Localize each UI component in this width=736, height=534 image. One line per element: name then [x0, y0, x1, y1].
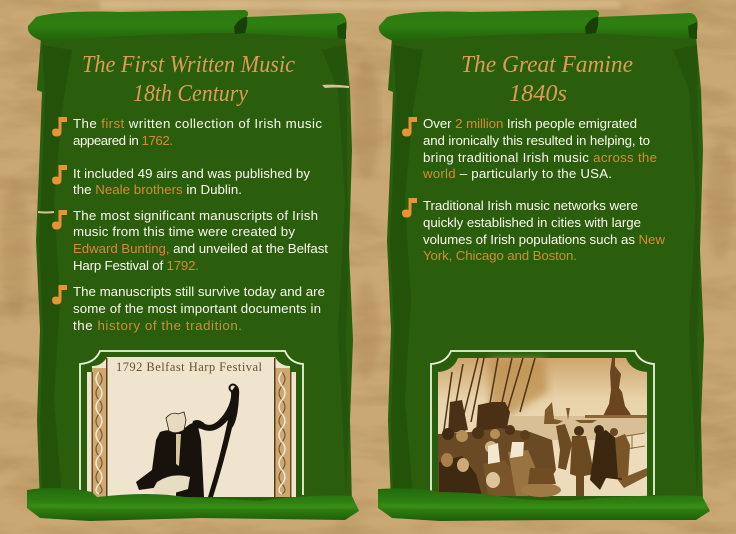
text block: music networks: [423, 198, 665, 263]
water: [500, 416, 647, 440]
sailing ships: [544, 402, 597, 424]
text block: surviving manuscripts: some of the most important documents in: [73, 301, 321, 316]
statue of liberty: [602, 358, 632, 418]
heading: the great famine 1840s: 1840s: [509, 81, 567, 107]
text block: manuscripts: music from this time were created by: [73, 224, 295, 239]
text block: emigration: Over 2 million Irish people emigrated: [423, 116, 637, 131]
text block: emigration: [422, 116, 657, 181]
text block: manuscripts: Edward Bunting, and unveiled at the Belfast: [73, 241, 328, 256]
text block: music networks: quickly established in cities with large: [423, 215, 641, 230]
picture: immigrants arriving by ship: [438, 358, 647, 497]
bottom roll: left scroll: [27, 488, 359, 521]
heading: the great famine 1840s: [461, 52, 633, 107]
text block: 49 airs: [73, 166, 310, 197]
text block: emigration: world – particularly to the USA.: [422, 166, 612, 181]
heading: the first written music 18th century: 18th Century: [133, 81, 248, 107]
picture caption: 1792 Belfast Harp Festival: [116, 360, 263, 374]
text block: 49 airs: the Neale brothers in Dublin.: [73, 182, 242, 197]
sailors on rigging: [448, 400, 510, 438]
text block: manuscripts: Harp Festival of 1792.: [73, 258, 199, 273]
text block: first collection: [73, 116, 322, 148]
heading: the first written music 18th century: [82, 52, 295, 107]
crowd of passengers: [438, 425, 561, 497]
top roll: [379, 10, 698, 42]
text block: first collection: The first written collection of Irish music: [73, 116, 322, 131]
top roll: [28, 10, 347, 42]
icon: music note: [402, 198, 417, 218]
text block: surviving manuscripts: [73, 284, 325, 333]
text block: music networks: Traditional Irish music networks were: [423, 198, 638, 213]
text block: music networks: volumes of Irish populations such as New: [423, 232, 665, 247]
harpist figure: [136, 384, 239, 497]
text block: music networks: York, Chicago and Boston.: [423, 248, 577, 263]
text block: manuscripts: [73, 208, 328, 273]
picture: 1792 Belfast Harp Festival: [87, 357, 296, 497]
heading: the great famine 1840s: The Great Famine: [461, 52, 633, 78]
text block: 49 airs: It included 49 airs and was published by: [73, 166, 310, 181]
icon: music note: [52, 210, 67, 230]
text block: first collection: appeared in 1762.: [73, 133, 173, 148]
clouds: [490, 358, 548, 415]
icon: music note: [52, 117, 67, 136]
text block: emigration: bring traditional Irish music across the: [423, 150, 657, 165]
icon: music note: [402, 117, 417, 136]
icon: music note: [52, 285, 67, 304]
text block: surviving manuscripts: The manuscripts still survive today and are: [73, 284, 325, 299]
standing passengers: [570, 436, 594, 496]
picture frame: left: [80, 351, 303, 495]
icon: music note: [52, 165, 67, 184]
text block: surviving manuscripts: the history of the tradition.: [73, 318, 242, 333]
scroll body: [387, 25, 704, 505]
bottom roll: right scroll: [378, 488, 710, 521]
ship masts and rigging: [443, 358, 535, 437]
deck: [540, 432, 647, 496]
text block: manuscripts: The most significant manuscripts of Irish: [73, 208, 318, 223]
heading: the first written music 18th century: The First Written Music: [82, 52, 295, 78]
text block: emigration: and ironically this resulted in helping, to: [423, 133, 650, 148]
picture frame: right: [431, 351, 654, 495]
panel: first written music scroll: [28, 10, 353, 505]
panel: great famine scroll: [379, 10, 704, 505]
scroll body: [36, 25, 353, 505]
